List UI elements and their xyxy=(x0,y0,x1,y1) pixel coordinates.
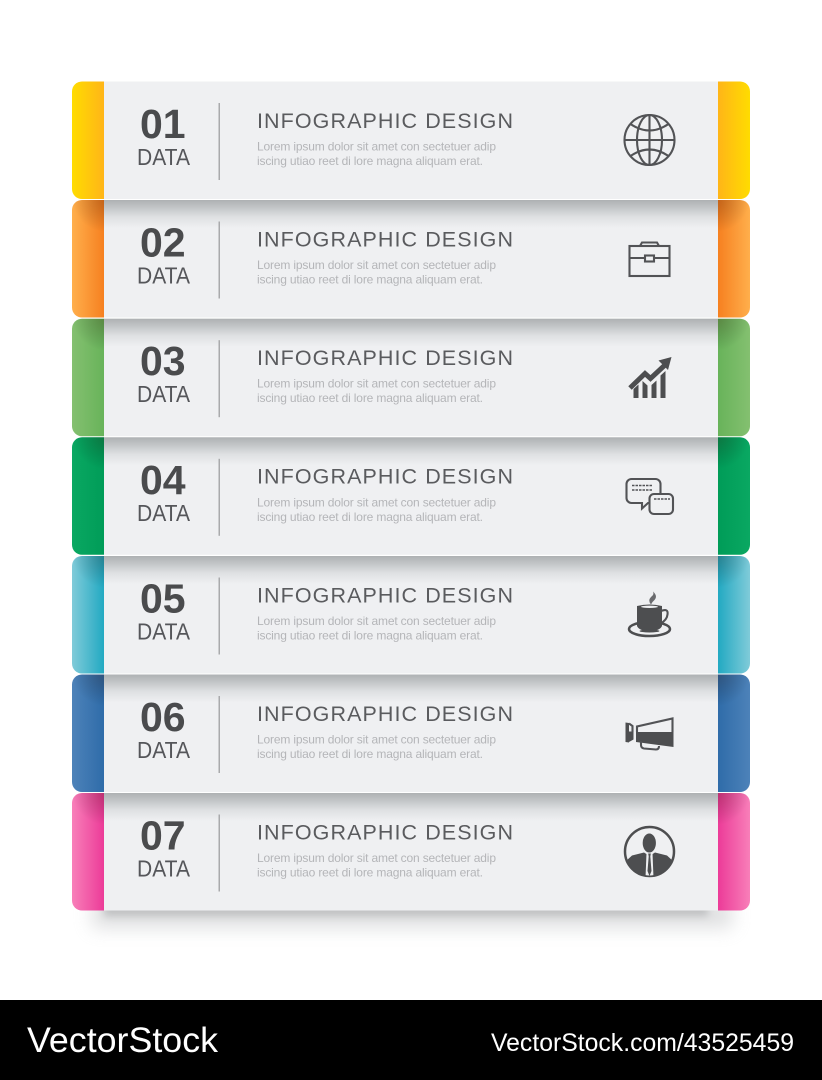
body text 02 xyxy=(257,258,496,286)
row 03 xyxy=(72,319,750,436)
icon: businessman xyxy=(625,827,674,880)
cyan left tab xyxy=(72,556,104,674)
heading 06: INFOGRAPHIC DESIGN xyxy=(257,702,513,726)
heading 02: INFOGRAPHIC DESIGN xyxy=(257,227,513,251)
heading 04: INFOGRAPHIC DESIGN xyxy=(257,465,513,489)
body text 05: Lorem ipsum dolor sit amet con sectetuer adip xyxy=(257,614,496,628)
blue right tab xyxy=(718,674,750,792)
body text 03: Lorem ipsum dolor sit amet con sectetuer adip xyxy=(257,377,496,391)
data label 04: DATA xyxy=(137,500,191,526)
icon: megaphone xyxy=(626,718,674,750)
divider 05 xyxy=(218,578,220,654)
body text 01: Lorem ipsum dolor sit amet con sectetuer adip xyxy=(257,140,496,154)
divider 01 xyxy=(218,103,220,180)
body text 03 xyxy=(257,377,496,405)
number 02: 02 xyxy=(140,220,186,266)
row 07 xyxy=(72,793,750,910)
cyan right tab xyxy=(718,556,750,674)
divider 03 xyxy=(218,340,220,417)
body text 05 xyxy=(257,614,496,642)
body text 06 xyxy=(257,732,496,761)
yellow left tab xyxy=(72,82,104,199)
panel 03 xyxy=(104,319,718,436)
row 01 xyxy=(72,82,750,199)
icon: chat bubbles xyxy=(626,479,673,514)
body text 07: Lorem ipsum dolor sit amet con sectetuer adip xyxy=(257,851,496,865)
icon: growth chart xyxy=(630,357,672,398)
number 06: 06 xyxy=(140,694,186,740)
body text 01: iscing utiao reet di lore magna aliquam erat. xyxy=(257,154,483,168)
number 04: 04 xyxy=(140,457,186,503)
orange right tab xyxy=(718,200,750,318)
data label 07: DATA xyxy=(137,856,191,882)
divider 06 xyxy=(218,696,220,773)
data label 03: DATA xyxy=(137,381,191,407)
body text 04 xyxy=(257,495,496,524)
body text 05: iscing utiao reet di lore magna aliquam erat. xyxy=(257,628,483,642)
divider 02 xyxy=(218,222,220,298)
number 03: 03 xyxy=(140,338,186,384)
data label 06: DATA xyxy=(137,737,191,763)
panel 01 xyxy=(104,82,718,199)
heading 03: INFOGRAPHIC DESIGN xyxy=(257,346,513,370)
bottom drop shadow xyxy=(92,900,732,928)
heading 01: INFOGRAPHIC DESIGN xyxy=(257,109,513,133)
data label 01: DATA xyxy=(137,144,191,170)
body text 02: Lorem ipsum dolor sit amet con sectetuer adip xyxy=(257,258,496,272)
emerald right tab xyxy=(718,437,750,555)
emerald left tab xyxy=(72,437,104,555)
body text 03: iscing utiao reet di lore magna aliquam erat. xyxy=(257,391,483,405)
icon: globe xyxy=(624,115,674,165)
icon: briefcase xyxy=(630,242,670,276)
row 06 xyxy=(72,674,750,792)
pink right tab xyxy=(718,793,750,910)
body text 07 xyxy=(257,851,496,880)
panel 07 xyxy=(104,793,718,910)
icon: coffee cup xyxy=(629,592,670,636)
pink left tab xyxy=(72,793,104,910)
divider 07 xyxy=(218,814,220,892)
row 04 xyxy=(72,437,750,555)
green right tab xyxy=(718,319,750,436)
footer brand: VectorStock xyxy=(27,1021,219,1060)
panel 04 xyxy=(104,437,718,555)
body text 04: Lorem ipsum dolor sit amet con sectetuer adip xyxy=(257,495,496,509)
footer url: VectorStock.com/43525459 xyxy=(491,1029,794,1057)
body text 04: iscing utiao reet di lore magna aliquam erat. xyxy=(257,510,483,524)
heading 05: INFOGRAPHIC DESIGN xyxy=(257,583,513,607)
data label 05: DATA xyxy=(137,618,191,644)
divider 04 xyxy=(218,459,220,536)
number 05: 05 xyxy=(140,576,186,622)
number 01: 01 xyxy=(140,101,186,147)
green left tab xyxy=(72,319,104,436)
data label 02: DATA xyxy=(137,262,191,288)
body text 02: iscing utiao reet di lore magna aliquam erat. xyxy=(257,272,483,286)
blue left tab xyxy=(72,674,104,792)
row 05 xyxy=(72,556,750,674)
body text 07: iscing utiao reet di lore magna aliquam erat. xyxy=(257,866,483,880)
panel 06 xyxy=(104,674,718,792)
panel 05 xyxy=(104,556,718,674)
heading 07: INFOGRAPHIC DESIGN xyxy=(257,820,513,844)
footer bar xyxy=(0,1000,822,1080)
body text 06: iscing utiao reet di lore magna aliquam erat. xyxy=(257,747,483,761)
body text 01 xyxy=(257,140,496,168)
number 07: 07 xyxy=(140,812,186,858)
body text 06: Lorem ipsum dolor sit amet con sectetuer adip xyxy=(257,732,496,746)
panel 02 xyxy=(104,200,718,318)
yellow right tab xyxy=(718,82,750,199)
row 02 xyxy=(72,200,750,318)
orange left tab xyxy=(72,200,104,318)
